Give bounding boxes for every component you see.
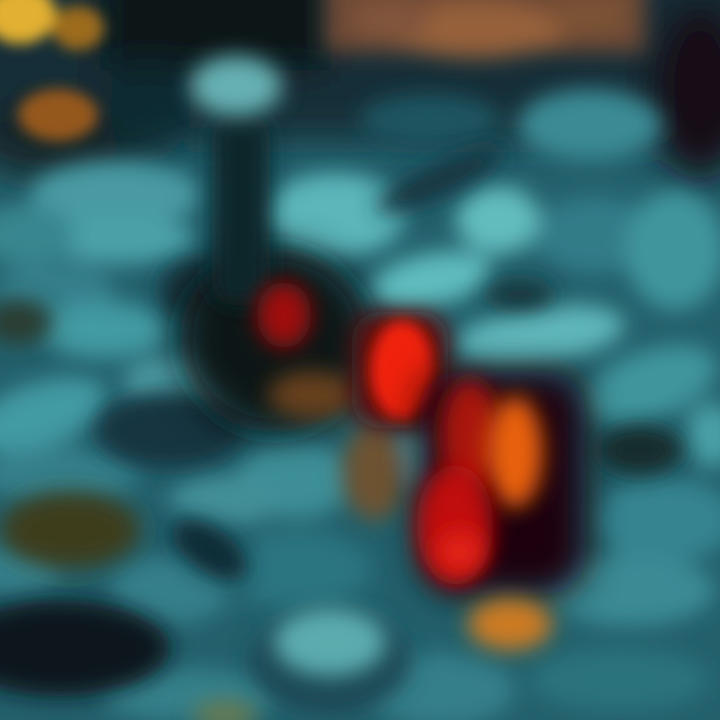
bottom edge warm tint xyxy=(193,701,257,720)
bottle xyxy=(180,56,370,432)
glass red lower xyxy=(417,465,493,585)
large dark glass xyxy=(417,372,585,594)
amber reflection below glass xyxy=(468,598,552,650)
small amber glass xyxy=(343,424,442,520)
top orange-brown band xyxy=(325,0,645,58)
bottle neck xyxy=(212,115,270,305)
dark shadow folds xyxy=(0,136,682,593)
glass orange highlight xyxy=(487,396,543,508)
top-left warm lights xyxy=(0,0,104,141)
background: dark upper band xyxy=(0,0,720,180)
bottom-left dark object xyxy=(0,492,170,696)
bottle body xyxy=(180,248,370,432)
bottle amber base xyxy=(268,371,356,419)
bottle cap xyxy=(190,56,282,116)
bottle red reflection xyxy=(257,282,311,348)
red glass xyxy=(352,312,448,428)
bottom centre bowl xyxy=(250,608,410,714)
